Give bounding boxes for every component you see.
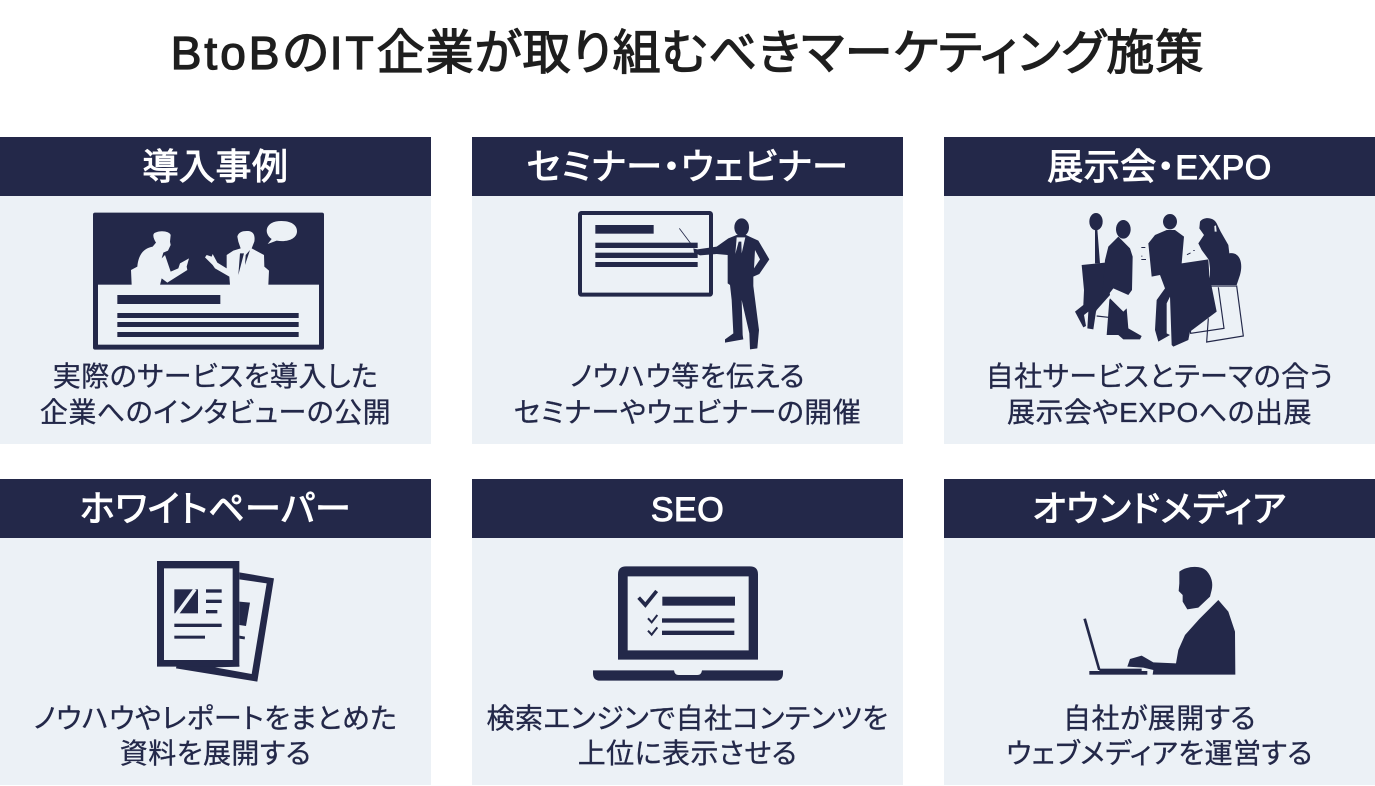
description: 実際のサービスを導入した (53, 361, 378, 392)
icon: presenter (578, 211, 770, 350)
icon: laptop with checklist (593, 566, 783, 681)
description: ノウハウやレポートをまとめた (34, 703, 397, 734)
description: ウェブメディアを運営する (1006, 738, 1313, 769)
description (514, 361, 861, 428)
heading: 展示会・EXPO: 展示会・EXPO (1047, 146, 1272, 187)
description: 自社が展開する (1063, 703, 1256, 734)
description (1006, 703, 1313, 769)
heading: SEO (472, 479, 903, 538)
icon: interview (92, 212, 324, 350)
heading: オウンドメディア: オウンドメディア (1032, 488, 1287, 529)
panel: 導入事例 (0, 137, 431, 444)
description: セミナーやウェビナーの開催 (514, 396, 861, 428)
heading: 導入事例: 導入事例 (142, 146, 288, 187)
description (40, 361, 391, 428)
heading: セミナー・ウェビナー (472, 137, 903, 196)
description: 自社サービスとテーマの合う (986, 361, 1333, 392)
panel: ホワイトペーパー (0, 479, 431, 785)
description (986, 361, 1333, 428)
icon: documents (157, 561, 274, 682)
heading: SEO: SEO (651, 491, 724, 529)
heading: オウンドメディア (944, 479, 1375, 538)
description: 資料を展開する (120, 738, 311, 769)
description (34, 703, 397, 769)
icon: exhibition people (1075, 213, 1244, 347)
panel: SEO (472, 479, 903, 785)
description (486, 703, 888, 769)
icon: person at laptop (1083, 566, 1236, 675)
description: 検索エンジンで自社コンテンツを (486, 703, 888, 734)
panel: セミナー・ウェビナー (472, 137, 903, 444)
title: BtoBのIT企業が取り組むべきマーケティング施策 (171, 27, 1204, 80)
heading: セミナー・ウェビナー: セミナー・ウェビナー (527, 146, 848, 187)
description: 企業へのインタビューの公開 (40, 396, 391, 428)
description: 展示会やEXPOへの出展 (1007, 396, 1312, 428)
heading: 導入事例 (0, 137, 431, 196)
description: 上位に表示させる (578, 738, 797, 769)
heading: ホワイトペーパー (0, 479, 431, 538)
panel: オウンドメディア (944, 479, 1375, 785)
description: ノウハウ等を伝える (570, 361, 805, 392)
heading: ホワイトペーパー: ホワイトペーパー (80, 488, 351, 529)
heading: 展示会・EXPO (944, 137, 1375, 196)
panel: 展示会・EXPO (944, 137, 1375, 444)
